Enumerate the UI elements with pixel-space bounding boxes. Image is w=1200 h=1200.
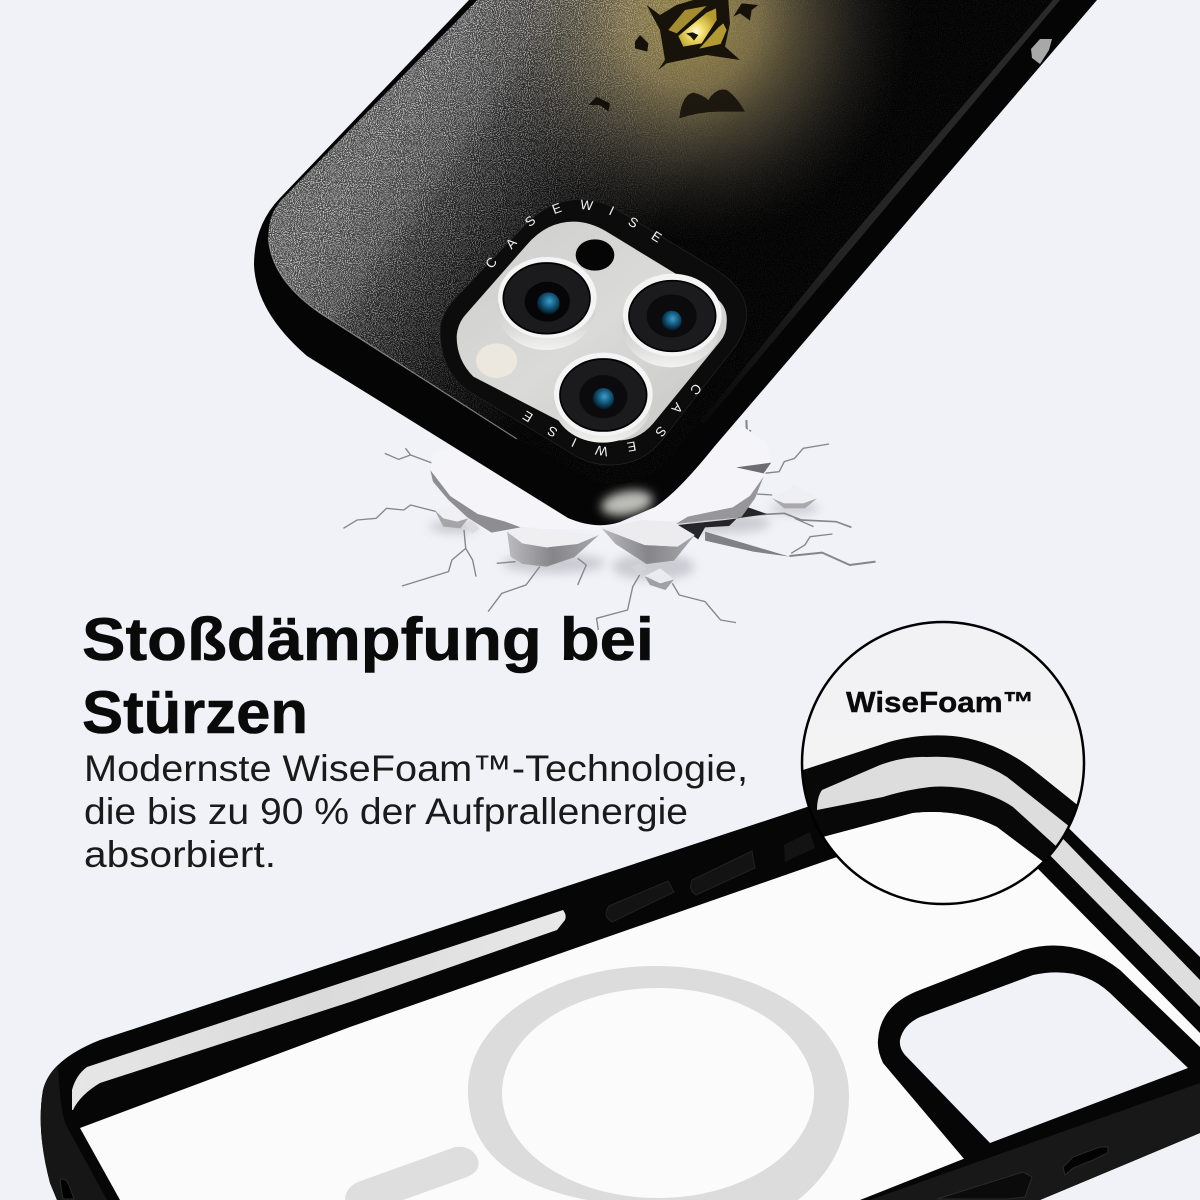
MagSafe alignment bar xyxy=(345,1147,479,1200)
callout: WiseFoam magnifier xyxy=(790,622,1090,920)
side button highlight xyxy=(1031,39,1052,64)
lower side band shading xyxy=(870,1083,1200,1200)
lantern left pane xyxy=(668,6,707,33)
large crack wedge xyxy=(705,532,789,557)
left side band shading xyxy=(41,1065,107,1200)
magnifier fill xyxy=(802,622,1084,904)
lantern frame xyxy=(647,0,740,70)
flash xyxy=(476,343,517,378)
flame silhouette xyxy=(686,32,698,41)
lens 2 xyxy=(622,274,722,367)
camera cut-out frame xyxy=(878,946,1200,1160)
magnifier outline xyxy=(802,622,1084,904)
case corner highlight xyxy=(599,487,655,519)
brand text on bump, upper arc: I xyxy=(607,203,616,218)
brand text on bump, lower arc: A xyxy=(669,400,686,417)
panel edge highlight xyxy=(268,237,517,439)
brand text on bump, upper arc: S xyxy=(626,214,641,231)
dark gap xyxy=(678,507,767,539)
side button xyxy=(937,1172,1032,1199)
lifted left chunk xyxy=(430,440,602,530)
magnified corner xyxy=(803,735,1076,862)
small rock fragments xyxy=(435,485,817,590)
brand text on bump, upper arc: E xyxy=(550,200,564,217)
case black frame xyxy=(41,745,1200,1200)
lifted right chunk edge xyxy=(676,477,764,524)
lens 1 xyxy=(497,257,597,350)
lantern artwork xyxy=(588,0,758,118)
lantern right pane xyxy=(699,23,727,49)
brand text on bump, lower arc: E xyxy=(520,408,535,425)
body text: Modernste WiseFoam™-Technologie, xyxy=(84,748,748,789)
lantern glowing pane xyxy=(678,8,717,47)
brand text on bump, upper arc: S xyxy=(522,212,539,230)
brand text on bump, lower arc: S xyxy=(545,423,560,440)
crack shadows xyxy=(430,502,819,580)
brand text on bump, lower arc: S xyxy=(652,423,669,440)
volume button 1 xyxy=(606,881,674,922)
lens 3 xyxy=(554,353,653,443)
brand text on bump, lower arc: C xyxy=(687,380,705,398)
camera window xyxy=(457,222,727,440)
body text: absorbiert. xyxy=(84,834,276,875)
brand text on bump, upper arc: E xyxy=(649,228,664,246)
brand text on bump, upper arc: W xyxy=(579,197,594,214)
microphone hole xyxy=(576,239,614,271)
brand text on bump, lower arc xyxy=(520,380,705,459)
top phone case shell xyxy=(254,0,1097,525)
heading: Stürzen xyxy=(82,679,308,746)
rock fragment centre left xyxy=(507,527,599,567)
magnifier label: WiseFoam™ xyxy=(846,687,1034,719)
bat silhouettes xyxy=(588,3,758,118)
camera module xyxy=(440,197,747,465)
heading: Stoßdämpfung bei xyxy=(82,606,654,673)
brand text on bump, lower arc: W xyxy=(594,442,609,459)
camera cut-out window xyxy=(900,972,1188,1143)
brand text on bump, lower arc: E xyxy=(626,438,637,455)
illustration: cracked wall impact xyxy=(343,420,876,630)
lifted left chunk edge xyxy=(430,470,521,533)
charging port xyxy=(1063,1147,1108,1175)
clear back panel xyxy=(80,808,1200,1200)
foam strip, long side xyxy=(72,910,566,1110)
open transparent case xyxy=(41,745,1200,1200)
action button xyxy=(784,832,815,862)
MagSafe ring xyxy=(468,966,849,1200)
bottom left port xyxy=(60,1179,74,1199)
heading xyxy=(82,606,654,746)
case right edge band xyxy=(695,0,1060,424)
body text: die bis zu 90 % der Aufprallenergie xyxy=(84,791,688,832)
foam strip, right side xyxy=(1020,815,1200,1007)
dark wedge xyxy=(736,463,771,473)
camera bump xyxy=(440,199,747,465)
back panel artwork xyxy=(268,0,1052,484)
brand text on bump, lower arc: I xyxy=(569,435,579,450)
lifted right chunk xyxy=(643,427,770,523)
body text xyxy=(84,748,748,875)
volume button 2 xyxy=(691,851,755,895)
crack lines xyxy=(343,420,876,630)
brand text on bump, upper arc: C xyxy=(482,254,500,271)
brand text on bump, upper arc: A xyxy=(503,235,520,252)
brand text on bump, upper arc xyxy=(482,197,664,271)
rock fragment centre right xyxy=(602,520,695,564)
